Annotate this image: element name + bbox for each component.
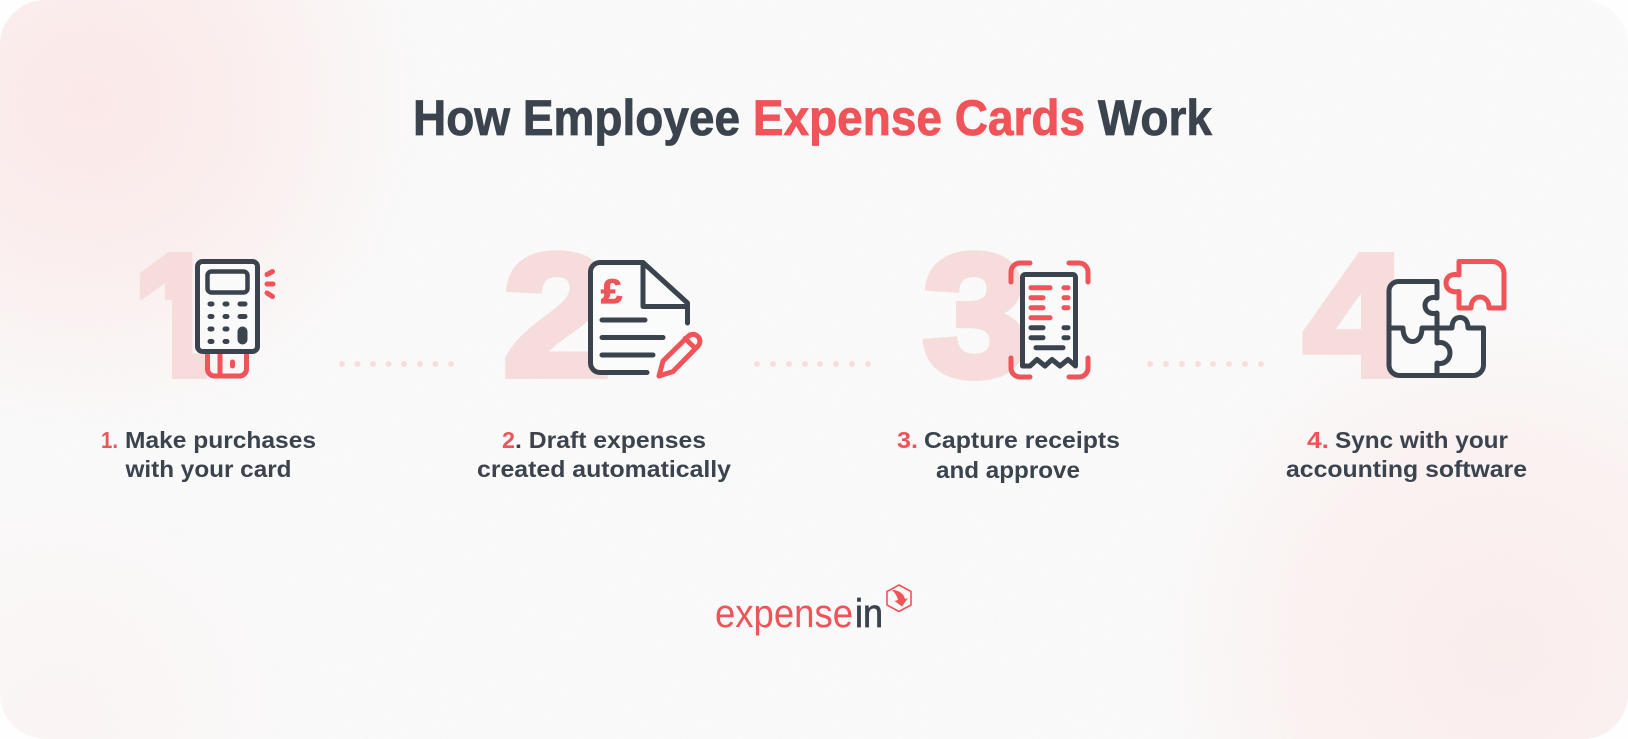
- icon: logo hexagon: [887, 585, 911, 612]
- icon: expense document: £: [601, 273, 622, 311]
- numeral 4: 4: [1304, 218, 1408, 412]
- icon: expense document: [590, 262, 700, 376]
- logo: [715, 585, 911, 636]
- step 3 label: 3.: [897, 427, 918, 453]
- step 2 label: 2: [502, 427, 515, 453]
- step 2 label: . Draft expenses: [515, 427, 706, 453]
- dotted connector 3: [1147, 361, 1264, 367]
- step 4: [1286, 218, 1527, 482]
- icon: card terminal: [198, 262, 273, 376]
- step 1 label: with your card: [124, 456, 292, 482]
- step 3 label: Capture receipts: [924, 427, 1120, 453]
- numeral 2: 2: [503, 218, 611, 412]
- step 4 label: accounting software: [1286, 456, 1527, 482]
- dotted connector 1: [339, 361, 454, 367]
- numeral 1: 1: [133, 218, 217, 412]
- step 1 label: 1.: [101, 427, 118, 453]
- icon: puzzle pieces: [1389, 262, 1504, 376]
- logo wordmark: in: [855, 592, 883, 636]
- step 1 label: Make purchases: [125, 427, 316, 453]
- step 3: [897, 218, 1120, 483]
- step 2: [477, 218, 731, 482]
- step 4 label: Sync with your: [1335, 427, 1508, 453]
- dotted connector 2: [754, 361, 871, 367]
- icon: receipt scan: [1011, 263, 1088, 377]
- step 1: [102, 252, 315, 482]
- step 2 label: created automatically: [477, 456, 731, 482]
- step 4 label: 4.: [1307, 427, 1329, 453]
- logo wordmark: expense: [715, 592, 853, 636]
- step 3 label: and approve: [936, 457, 1080, 483]
- numeral 3: 3: [923, 218, 1027, 412]
- title: How Employee Expense Cards Work: [413, 90, 1212, 146]
